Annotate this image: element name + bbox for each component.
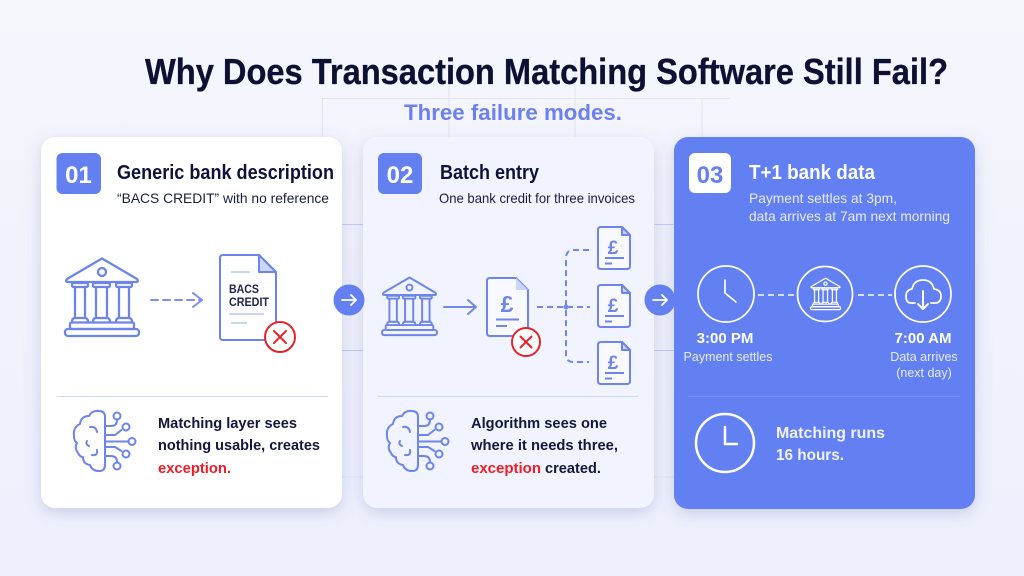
label: 3:00 PM: 3:00 PM <box>697 330 753 347</box>
icon: bank <box>65 258 139 336</box>
icon: BACS CREDIT document with error: CREDIT <box>229 297 269 309</box>
label: 3:00 PM: Payment settles <box>684 350 772 364</box>
icon: invoice 1 <box>598 227 630 269</box>
panel: card 2 batch entry <box>363 137 654 508</box>
arrow: solid <box>444 300 476 314</box>
label: 7:00 AM: 7:00 AM <box>895 330 951 347</box>
conclusion text 01: Matching layer sees <box>158 415 297 432</box>
title: Why Does Transaction Matching Software Still Fail? <box>145 51 948 92</box>
heading 01: Generic bank description <box>117 162 334 184</box>
subheading 03 <box>749 190 950 224</box>
badge 02: 02 <box>387 162 413 189</box>
conclusion text 02: created. <box>545 460 601 477</box>
conclusion text 01 <box>158 415 320 477</box>
subheading 03: data arrives at 7am next morning <box>749 208 950 224</box>
icon: invoice with error: £ <box>501 291 514 317</box>
label: 7:00 AM: Data arrives <box>890 350 958 364</box>
panel: card 3 T+1 bank data <box>674 137 975 509</box>
icon: invoice 1: £ <box>608 238 619 259</box>
label: 3:00 PM <box>684 330 772 364</box>
conclusion text 02: exception <box>471 460 541 477</box>
icon: bank <box>382 278 437 335</box>
icon: clock 3 PM <box>698 266 754 322</box>
conclusion text 01: nothing usable, creates <box>158 437 320 454</box>
subtitle: Three failure modes. <box>404 100 622 125</box>
conclusion text 02: Algorithm sees one <box>471 415 607 432</box>
subheading 02: One bank credit for three invoices <box>439 190 635 206</box>
conclusion text 02 <box>470 415 618 477</box>
label: 7:00 AM <box>890 330 958 380</box>
badge 01: 01 <box>65 162 92 189</box>
icon: invoice 3: £ <box>608 353 619 374</box>
arrow: card 2 to card 3 <box>644 284 676 316</box>
icon: invoice 2 <box>598 285 630 327</box>
icon: invoice 2: £ <box>608 296 619 317</box>
conclusion text 03: Matching runs <box>776 425 885 442</box>
connector: dashed split <box>537 250 590 362</box>
subheading 01: “BACS CREDIT” with no reference <box>117 190 329 206</box>
icon: bank in circle <box>798 266 852 322</box>
icon: invoice with error <box>487 278 540 356</box>
heading 03: T+1 bank data <box>749 162 876 184</box>
conclusion text 03 <box>776 425 885 464</box>
conclusion text 02: where it needs three, <box>470 437 618 454</box>
arrow: card 1 to card 2 <box>334 284 364 316</box>
icon: brain <box>74 411 136 471</box>
icon: cloud download <box>895 266 951 322</box>
icon: large clock <box>696 414 754 472</box>
heading 02: Batch entry <box>440 162 540 184</box>
conclusion text 01: exception. <box>158 460 231 477</box>
arrow: dashed <box>151 293 202 307</box>
badge 01 <box>56 153 101 194</box>
icon: BACS CREDIT document with error: BACS <box>229 284 259 296</box>
icon: invoice 3 <box>598 342 630 384</box>
subheading 03: Payment settles at 3pm, <box>749 190 897 206</box>
badge 02 <box>378 153 422 194</box>
conclusion text 03: 16 hours. <box>776 447 844 464</box>
badge 03: 03 <box>697 162 723 189</box>
icon: BACS CREDIT document with error <box>220 255 295 352</box>
badge 03 <box>689 153 731 193</box>
icon: brain <box>387 411 448 471</box>
label: 7:00 AM: (next day) <box>896 366 952 380</box>
panel: card 1 generic bank description <box>41 137 342 508</box>
